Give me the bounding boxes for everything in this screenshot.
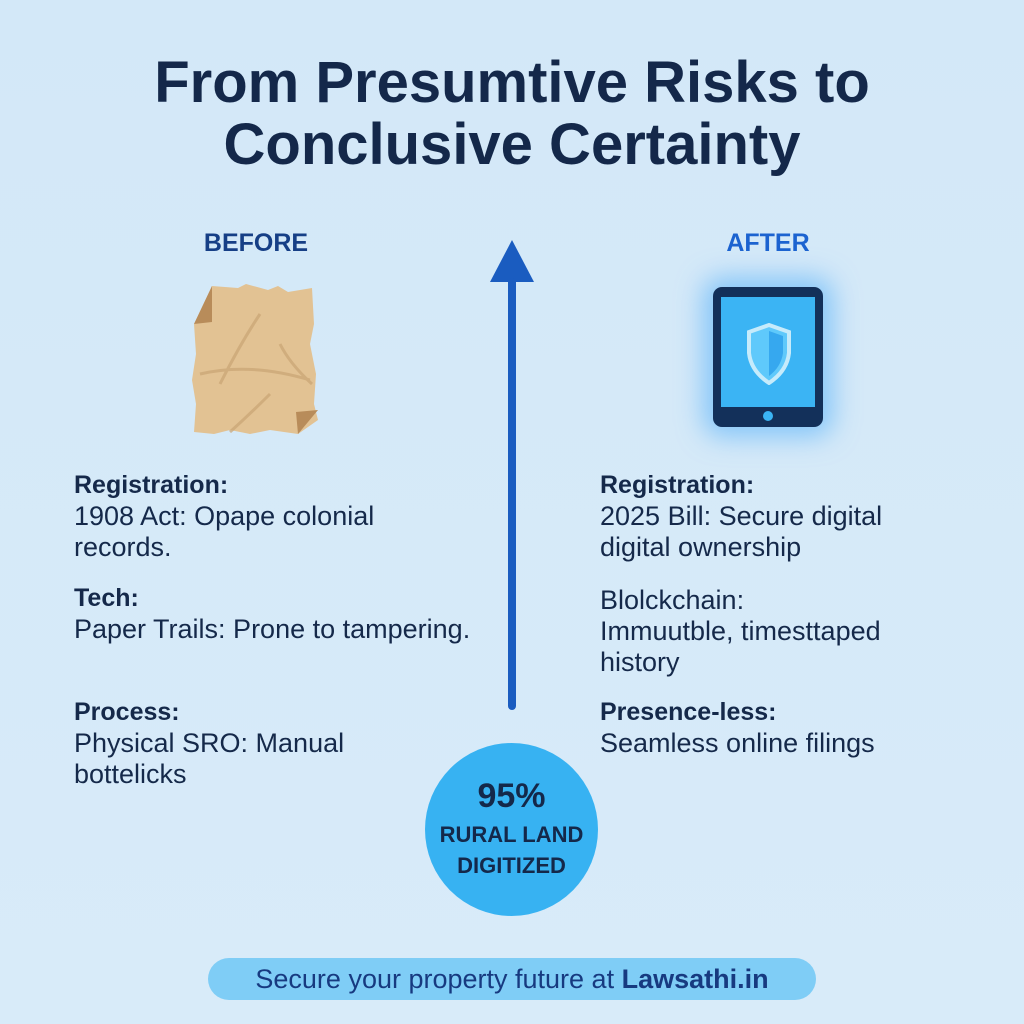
icon: old paper	[192, 284, 318, 434]
title	[154, 50, 870, 177]
text: before items: Registration:	[74, 471, 228, 499]
text: history	[600, 647, 680, 677]
text: before items	[74, 471, 374, 562]
text: Tech:	[74, 584, 139, 612]
title: From Presumtive Risks to	[154, 50, 870, 115]
text: before items: 1908 Act: Opape colonial	[74, 501, 374, 531]
footer pill	[208, 958, 816, 1000]
arrow	[490, 240, 534, 710]
heading: before: BEFORE	[204, 229, 308, 257]
heading: after: AFTER	[726, 229, 810, 257]
text: Physical SRO: Manual	[74, 728, 344, 758]
icon: tablet with shield	[686, 260, 850, 454]
text: Process:	[74, 698, 180, 726]
text: Seamless online filings	[600, 728, 875, 758]
text: Presence-less:	[600, 698, 777, 726]
text: after items: Registration:	[600, 471, 754, 499]
text: Blolckchain:	[600, 585, 744, 615]
text: Paper Trails: Prone to tampering.	[74, 614, 470, 644]
text: bottelicks	[74, 759, 187, 789]
text: before items: records.	[74, 532, 172, 562]
stat circle	[425, 743, 598, 916]
stat circle: 95%	[477, 777, 546, 815]
text: Immuutble, timesttaped	[600, 616, 881, 646]
text: after items: 2025 Bill: Secure digital	[600, 501, 882, 531]
text: after items	[600, 471, 882, 562]
stat circle: RURAL LAND	[440, 822, 583, 847]
text: after items: digital ownership	[600, 532, 801, 562]
stat circle: DIGITIZED	[457, 853, 566, 878]
title: Conclusive Certainty	[224, 112, 800, 177]
footer pill: Secure your property future at Lawsathi.in	[255, 964, 769, 994]
